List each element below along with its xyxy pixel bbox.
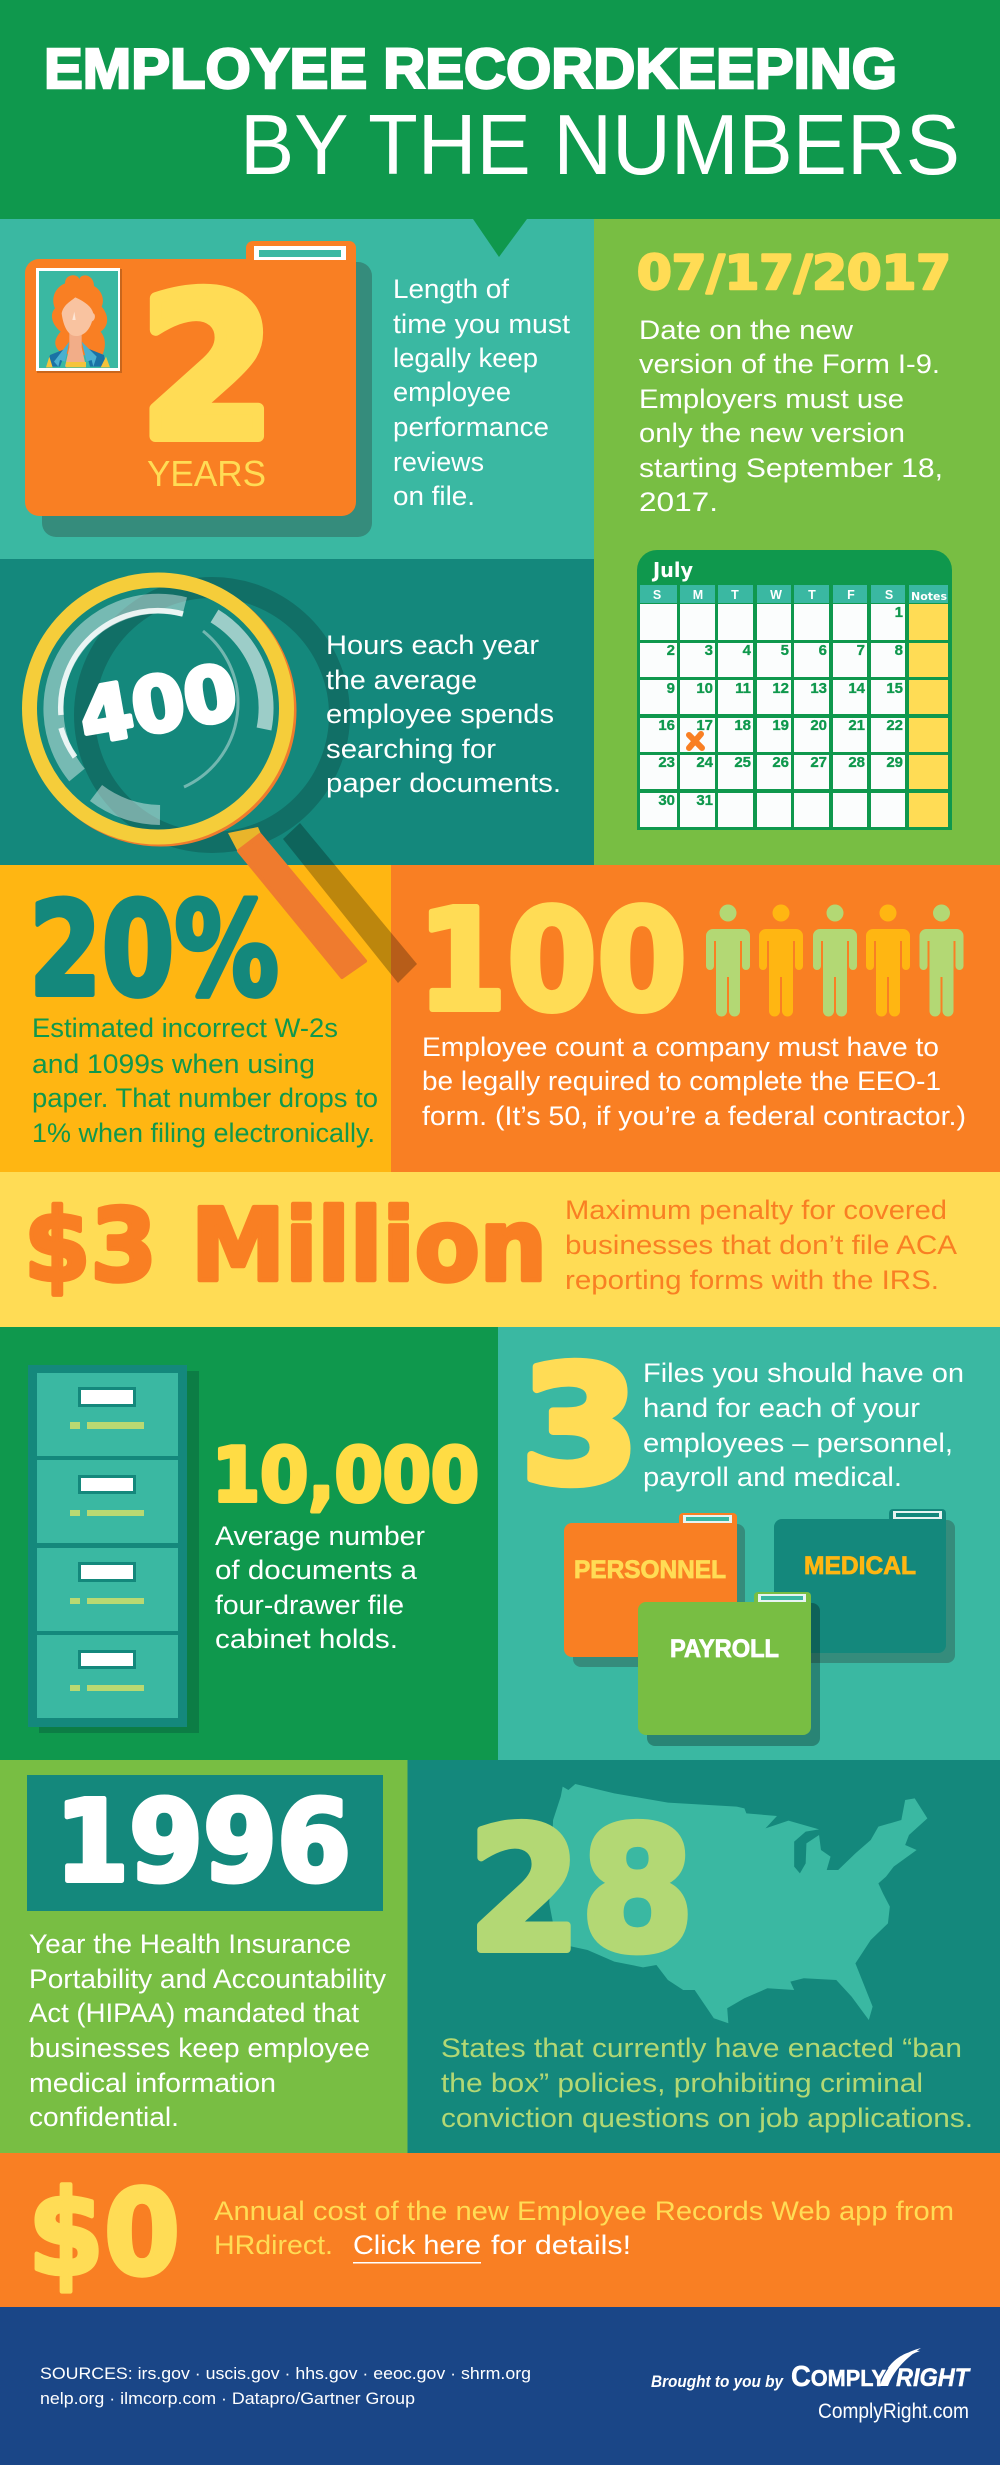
- text: 28 states description: [441, 2033, 973, 2133]
- calendar day headers: Notes: [911, 590, 947, 603]
- folder: medical: [774, 1509, 955, 1663]
- calendar grid: [640, 604, 948, 827]
- calendar dates: 24: [696, 754, 714, 771]
- text: sources: SOURCES: irs.gov · uscis.gov · hhs.gov · eeoc.gov · shrm.org: [40, 2364, 531, 2383]
- text: penalty description: businesses that don’t file ACA: [565, 1230, 957, 1260]
- calendar dates: 2: [667, 642, 675, 659]
- text: hours description: the average: [326, 665, 477, 695]
- text: HIPAA description: Portability and Accountability: [29, 1964, 387, 1994]
- panel: three million penalty: [0, 1172, 1000, 1327]
- text: 28 states description: conviction questions on job applications.: [441, 2103, 973, 2133]
- calendar day headers: [640, 585, 948, 603]
- calendar dates: 22: [886, 717, 903, 734]
- big number $0: $0: [28, 2164, 180, 2302]
- calendar dates: 19: [772, 717, 789, 734]
- folder: payroll: [638, 1592, 820, 1746]
- folder: personnel: PERSONNEL: [574, 1556, 726, 1584]
- text: web app description: Annual cost of the new Employee Records Web app from: [214, 2196, 954, 2226]
- calendar day headers: W: [770, 588, 782, 602]
- icon: magnifying glass: [28, 578, 417, 983]
- text: two years description: performance: [393, 412, 549, 442]
- text: three files description: Files you should have on: [643, 1358, 964, 1388]
- calendar month: July: [651, 558, 693, 582]
- date heading: 07/17/2017: [637, 246, 951, 301]
- text: HIPAA description: [29, 1929, 387, 2132]
- calendar dates: 28: [848, 754, 865, 771]
- calendar dates: 7: [857, 642, 865, 659]
- text: form I-9 description: [639, 315, 943, 517]
- big number $3 Million: Million: [191, 1187, 547, 1304]
- calendar dates: 10: [696, 680, 713, 697]
- panel: file cabinet: [0, 1327, 498, 1760]
- text: 100 description: [422, 1032, 966, 1131]
- text: 100 description: Employee count a company must have to: [422, 1032, 939, 1062]
- panel: two years: [0, 219, 594, 559]
- calendar dates: 26: [772, 754, 789, 771]
- calendar dates: 13: [810, 680, 827, 697]
- box with year 1996: 1996: [55, 1778, 351, 1908]
- text: 20 percent description: paper. That number drops to: [32, 1083, 378, 1113]
- text: three files description: hand for each of your: [643, 1393, 920, 1423]
- panel: form I-9 date: [594, 219, 1000, 865]
- panel: 28 states: [408, 1760, 1000, 2153]
- calendar dates: 15: [886, 680, 903, 697]
- text: three files description: employees – personnel,: [643, 1428, 953, 1458]
- text: 20 percent description: [32, 1013, 378, 1148]
- icon: orange x on the 17th: [689, 734, 702, 748]
- text: cabinet description: Average number: [215, 1521, 425, 1551]
- text: two years description: [393, 274, 571, 511]
- text: two years description: Length of: [393, 274, 510, 304]
- calendar dates: 5: [781, 642, 789, 659]
- panel: 20 percent: [0, 865, 391, 1172]
- calendar: July: [637, 550, 952, 830]
- text: web app description: [214, 2196, 954, 2264]
- text: HIPAA description: medical information: [29, 2068, 276, 2098]
- panel: 1996 HIPAA: [0, 1760, 408, 2153]
- text: two years description: reviews: [393, 447, 484, 477]
- folder: personnel: [564, 1513, 745, 1667]
- text: cabinet description: four-drawer file: [215, 1590, 404, 1620]
- calendar dates: 16: [658, 717, 675, 734]
- text: web app description: for details!: [491, 2230, 631, 2260]
- text: 28 states description: States that currently have enacted “ban: [441, 2033, 962, 2063]
- calendar day headers: T: [731, 588, 739, 602]
- calendar dates: 21: [848, 717, 865, 734]
- calendar dates: 4: [743, 642, 752, 659]
- big number 100: 100: [417, 880, 687, 1043]
- calendar day headers: S: [885, 588, 893, 602]
- text: hours description: paper documents.: [326, 768, 561, 798]
- text: hours description: [326, 630, 561, 798]
- logo: ComplyRight: [791, 2348, 972, 2393]
- calendar dates: 6: [819, 642, 827, 659]
- calendar dates: 18: [734, 717, 751, 734]
- text: cabinet description: of documents a: [215, 1555, 418, 1585]
- big number 20%: 20%: [29, 874, 279, 1026]
- calendar dates: [658, 604, 903, 809]
- text: form I-9 description: Date on the new: [639, 315, 854, 345]
- calendar day headers: M: [693, 588, 703, 602]
- calendar day headers: F: [847, 588, 855, 602]
- text: 100 description: be legally required to complete the EEO-1: [422, 1066, 941, 1096]
- text: 20 percent description: 1% when filing electronically.: [32, 1118, 375, 1148]
- calendar dates: 11: [735, 680, 751, 697]
- calendar dates: 17: [696, 717, 713, 734]
- text: hours description: employee spends: [326, 699, 554, 729]
- text: hours description: Hours each year: [326, 630, 539, 660]
- calendar day headers: T: [808, 588, 816, 602]
- folder: payroll: PAYROLL: [670, 1635, 779, 1663]
- calendar dates: 27: [810, 754, 827, 771]
- text: 20 percent description: Estimated incorrect W-2s: [32, 1013, 338, 1043]
- map: United States: [549, 1784, 927, 2023]
- text: three files description: [643, 1358, 964, 1492]
- logo: ComplyRight: RIGHT: [896, 2364, 972, 2392]
- text: HIPAA description: Act (HIPAA) mandated that: [29, 1998, 359, 2028]
- icon: file cabinet: [28, 1365, 199, 1733]
- big number $3 Million: [24, 1187, 547, 1304]
- title line one: EMPLOYEE RECORDKEEPING: [44, 37, 897, 101]
- logo: ComplyRight: COMPLY: [791, 2361, 886, 2393]
- text: 100 description: form. (It’s 50, if you’re a federal contractor.): [422, 1101, 966, 1131]
- text: form I-9 description: version of the Form I-9.: [639, 349, 940, 379]
- text: form I-9 description: Employers must use: [639, 384, 904, 414]
- calendar dates: 20: [810, 717, 827, 734]
- text: two years description: on file.: [393, 481, 475, 511]
- calendar dates: 25: [734, 754, 751, 771]
- big number 10,000: 10,000: [212, 1431, 479, 1519]
- text: cabinet description: cabinet holds.: [215, 1624, 398, 1654]
- text: 20 percent description: and 1099s when using: [32, 1049, 315, 1079]
- text: penalty description: Maximum penalty for covered: [565, 1195, 947, 1225]
- panel: 400 hours background: [0, 559, 594, 865]
- text: HIPAA description: confidential.: [29, 2102, 179, 2132]
- icon: row of people: [706, 904, 964, 1017]
- calendar dates: 30: [658, 792, 675, 809]
- text: website: ComplyRight.com: [818, 2400, 969, 2423]
- text: three files description: payroll and medical.: [643, 1462, 902, 1492]
- text: two years description: time you must: [393, 309, 571, 339]
- text: brought to you by: Brought to you by: [651, 2372, 784, 2391]
- text: form I-9 description: 2017.: [639, 487, 718, 517]
- calendar dates: 31: [696, 792, 713, 809]
- header: [0, 0, 1000, 257]
- text: penalty description: reporting forms with the IRS.: [565, 1265, 939, 1295]
- text: penalty description: [565, 1195, 957, 1295]
- header pointer arrow: [473, 219, 527, 257]
- big number $3 Million: $3: [24, 1187, 157, 1304]
- text: two years description: legally keep: [393, 343, 538, 373]
- calendar dates: 3: [705, 642, 713, 659]
- folder: two years: [25, 241, 372, 537]
- panel: 100 employees: [391, 865, 1000, 1172]
- big number 28: 28: [468, 1792, 694, 1990]
- folder: medical: MEDICAL: [804, 1552, 916, 1580]
- big number 400: 400: [73, 647, 244, 762]
- icon: employee portrait: [36, 268, 122, 373]
- panel: zero dollars: [0, 2153, 1000, 2307]
- text: HIPAA description: Year the Health Insurance: [29, 1929, 351, 1959]
- text: sources: [40, 2364, 531, 2408]
- YEARS label: YEARS: [147, 453, 266, 494]
- text: web app description: HRdirect.: [214, 2230, 333, 2260]
- text: form I-9 description: only the new version: [639, 418, 905, 448]
- text: cabinet description: [215, 1521, 425, 1654]
- text: two years description: employee: [393, 377, 511, 407]
- text: sources: nelp.org · ilmcorp.com · Datapro/Gartner Group: [40, 2389, 415, 2408]
- calendar dates: 1: [895, 604, 903, 621]
- calendar dates: 23: [658, 754, 675, 771]
- footer: [0, 2307, 1000, 2465]
- text: hours description: searching for: [326, 734, 496, 764]
- panel: three files: [498, 1327, 1000, 1760]
- text: web app description: Click here: [353, 2230, 481, 2260]
- calendar day headers: S: [653, 588, 661, 602]
- calendar dates: 8: [895, 642, 903, 659]
- calendar dates: 9: [667, 680, 675, 697]
- calendar dates: 29: [886, 754, 903, 771]
- calendar dates: 12: [772, 680, 789, 697]
- big number 3: 3: [520, 1333, 640, 1521]
- title line two: BY THE NUMBERS: [240, 98, 960, 193]
- text: 28 states description: the box” policies, prohibiting criminal: [441, 2068, 923, 2098]
- calendar dates: 14: [848, 680, 866, 697]
- text: form I-9 description: starting September 18,: [639, 453, 943, 483]
- text: HIPAA description: businesses keep employee: [29, 2033, 370, 2063]
- big number 2: 2: [140, 254, 275, 483]
